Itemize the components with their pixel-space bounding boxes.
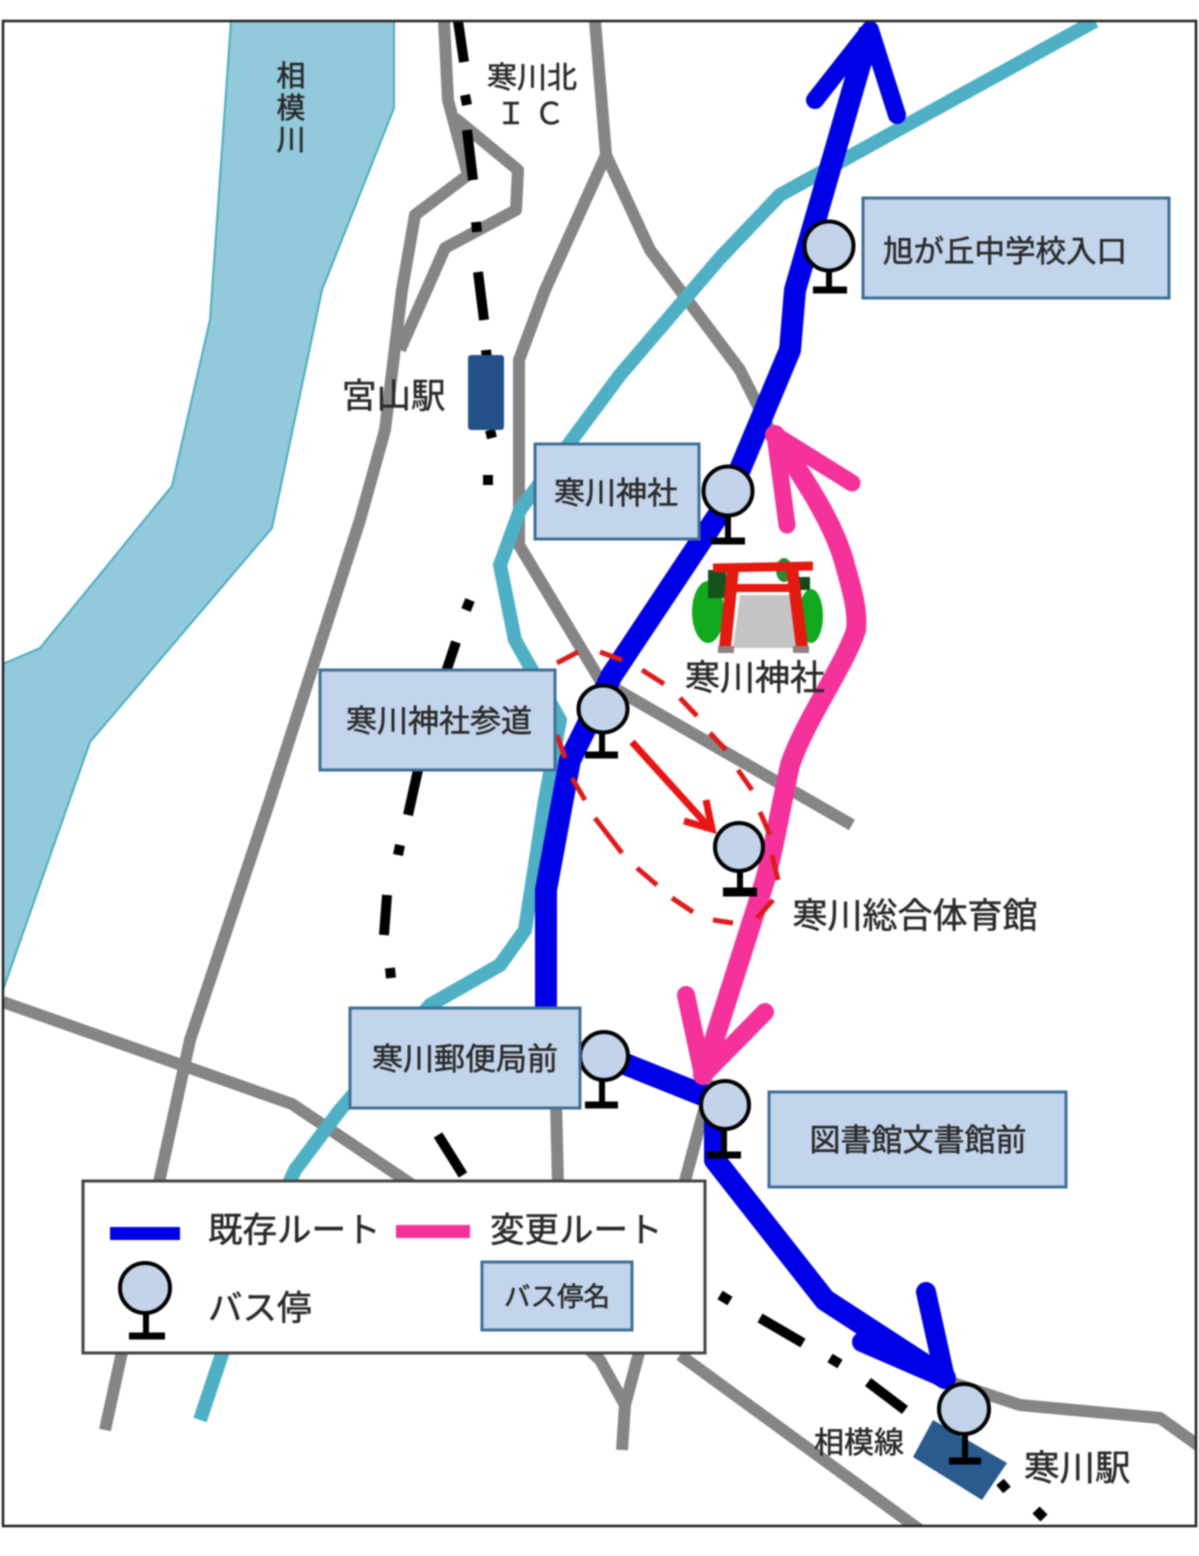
label box: Post Office: 寒川郵便局前 — [372, 1042, 558, 1077]
relocation arrow — [632, 742, 712, 829]
icon: Samukawa Shrine torii — [692, 558, 823, 653]
label box: Post Office — [350, 1008, 580, 1108]
station: Samukawa — [913, 1420, 1007, 1500]
legend: bus stop name — [482, 1262, 632, 1330]
changed route (pink) — [686, 435, 856, 1075]
label box: Library — [769, 1092, 1066, 1187]
legend: existing route — [110, 1212, 380, 1250]
shrine label: 寒川神社 — [685, 659, 825, 698]
river label: 川 — [276, 125, 306, 157]
legend: changed route — [396, 1212, 662, 1250]
bus stop: Gymnasium — [715, 823, 763, 892]
label box: Shrine approach — [320, 670, 555, 770]
bus stop: Library — [701, 1081, 749, 1155]
legend: bus stop: バス停 — [208, 1290, 312, 1328]
legend: changed route: 変更ルート — [490, 1212, 662, 1250]
IC label: Ｉ Ｃ — [496, 98, 564, 131]
label box: Library: 図書館文書館前 — [810, 1123, 1026, 1158]
existing route (blue) — [546, 30, 945, 1378]
gymnasium label: 寒川総合体育館 — [792, 897, 1038, 936]
Samukawa Station label: 寒川駅 — [1024, 1448, 1131, 1488]
river label: 模 — [276, 92, 306, 125]
relocation highlight: dashed ellipse — [557, 652, 778, 923]
teal waterway — [200, 21, 1095, 1420]
river: Sagami River — [3, 21, 394, 990]
IC label — [487, 62, 577, 131]
legend: bus stop name: バス停名 — [504, 1282, 610, 1312]
bus stop: Samukawa Shrine — [704, 466, 752, 541]
IC label: 寒川北 — [487, 62, 577, 95]
bus stop: Shrine approach — [578, 686, 628, 755]
legend: existing route: 既存ルート — [208, 1212, 380, 1250]
bus stop: Samukawa Station — [939, 1384, 989, 1461]
label box: Asahigaoka — [863, 198, 1169, 298]
bus stop: Post Office — [580, 1032, 628, 1105]
label box: Shrine approach: 寒川神社参道 — [346, 704, 532, 739]
legend: bus stop — [120, 1263, 312, 1336]
railway line: Sagami Line — [384, 21, 1044, 1518]
river label: 相 — [276, 60, 306, 93]
legend — [83, 1181, 705, 1353]
Sagami Line label: 相模線 — [814, 1427, 904, 1460]
label box: Asahigaoka: 旭が丘中学校入口 — [883, 235, 1127, 269]
label box: Samukawa Shrine — [535, 444, 699, 539]
station: Miyayama — [468, 355, 504, 430]
bus stop: Asahigaoka — [804, 222, 854, 290]
river label — [276, 60, 306, 157]
label box: Samukawa Shrine: 寒川神社 — [554, 476, 678, 511]
Miyayama Station label: 宮山駅 — [342, 378, 446, 416]
